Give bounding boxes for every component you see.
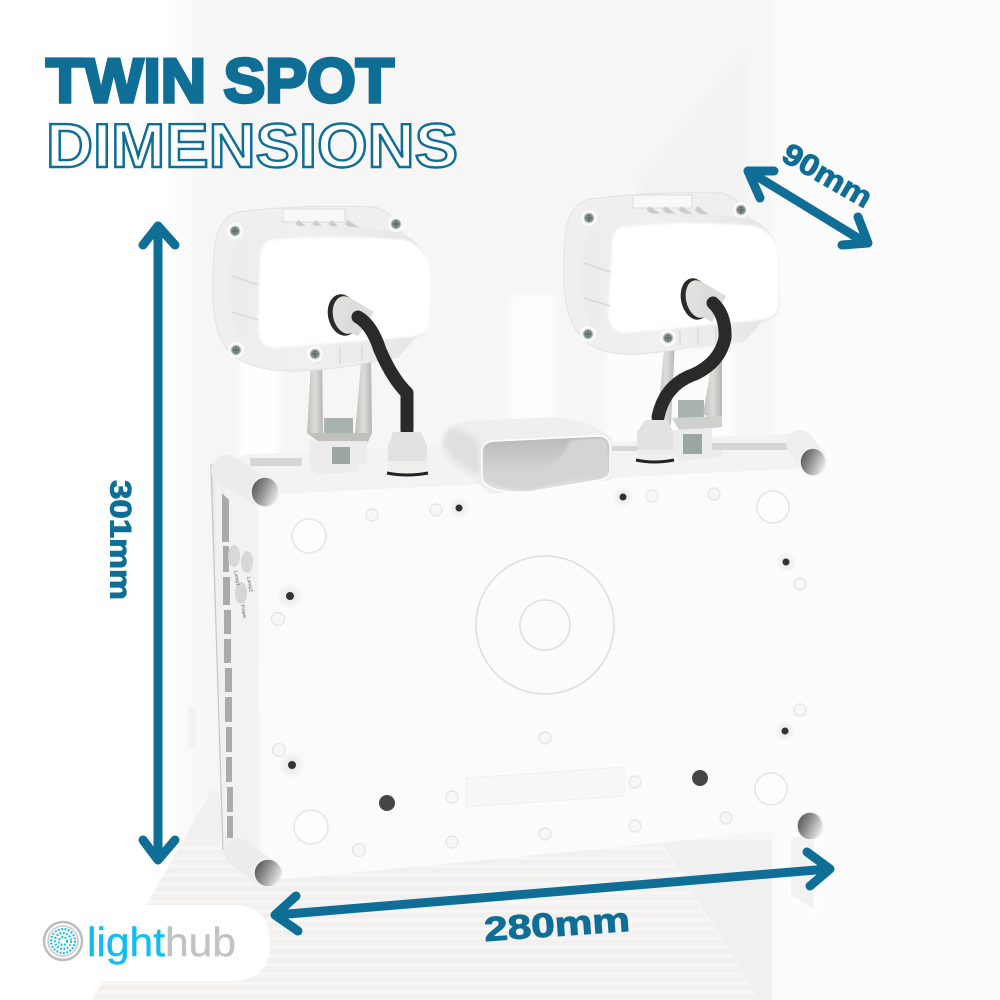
bottom recess — [466, 767, 624, 807]
corner tubes — [226, 444, 826, 887]
mounting bracket — [307, 345, 372, 474]
arrow: width — [275, 852, 830, 931]
small bosses — [272, 488, 806, 856]
right spot lamp — [564, 193, 780, 462]
left spot lamp — [213, 206, 430, 475]
label: 301mm: 301mm — [104, 480, 136, 600]
back plate — [564, 193, 755, 354]
mounting bracket — [657, 340, 722, 461]
label: 90mm: 90mm — [776, 137, 878, 215]
logo icon — [44, 922, 82, 960]
cable gland — [324, 291, 374, 339]
lamp body — [582, 213, 780, 350]
screws — [227, 223, 243, 239]
heading: twin spot: TWIN SPOT — [46, 47, 394, 116]
screw holes — [276, 486, 797, 811]
central duct — [442, 417, 612, 494]
screws — [581, 210, 597, 226]
title — [46, 47, 458, 181]
emergency light housing — [210, 417, 826, 887]
lower gland — [387, 432, 428, 475]
status indicators — [228, 545, 254, 620]
housing side with vents — [210, 458, 264, 886]
logo wordmark: lighthub — [87, 919, 236, 965]
label: 280mm: 280mm — [483, 901, 631, 949]
lamp body — [229, 226, 430, 365]
lower gland — [636, 420, 674, 462]
black cable — [358, 317, 407, 430]
status indicators: Power — [239, 604, 247, 620]
status indicators: Lamp1 — [232, 570, 241, 587]
black cable — [658, 303, 725, 417]
blurred corridor background — [92, 0, 814, 1000]
housing top edge — [214, 433, 826, 495]
arrow: depth — [748, 171, 868, 245]
heading: dimensions: DIMENSIONS — [46, 112, 458, 181]
centre knockout — [476, 556, 614, 694]
large round knockouts — [292, 491, 789, 844]
housing front face — [258, 468, 821, 880]
status indicators: Lamp2 — [245, 576, 254, 593]
logo panel — [0, 905, 270, 981]
back plate — [213, 206, 412, 371]
arrow: height — [143, 226, 175, 860]
cable gland — [677, 276, 726, 322]
